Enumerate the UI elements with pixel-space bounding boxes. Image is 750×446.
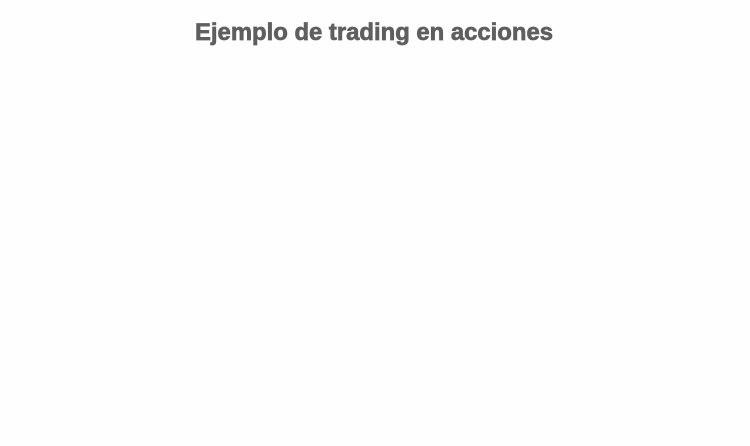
title: Ejemplo de trading en acciones — [195, 19, 553, 46]
